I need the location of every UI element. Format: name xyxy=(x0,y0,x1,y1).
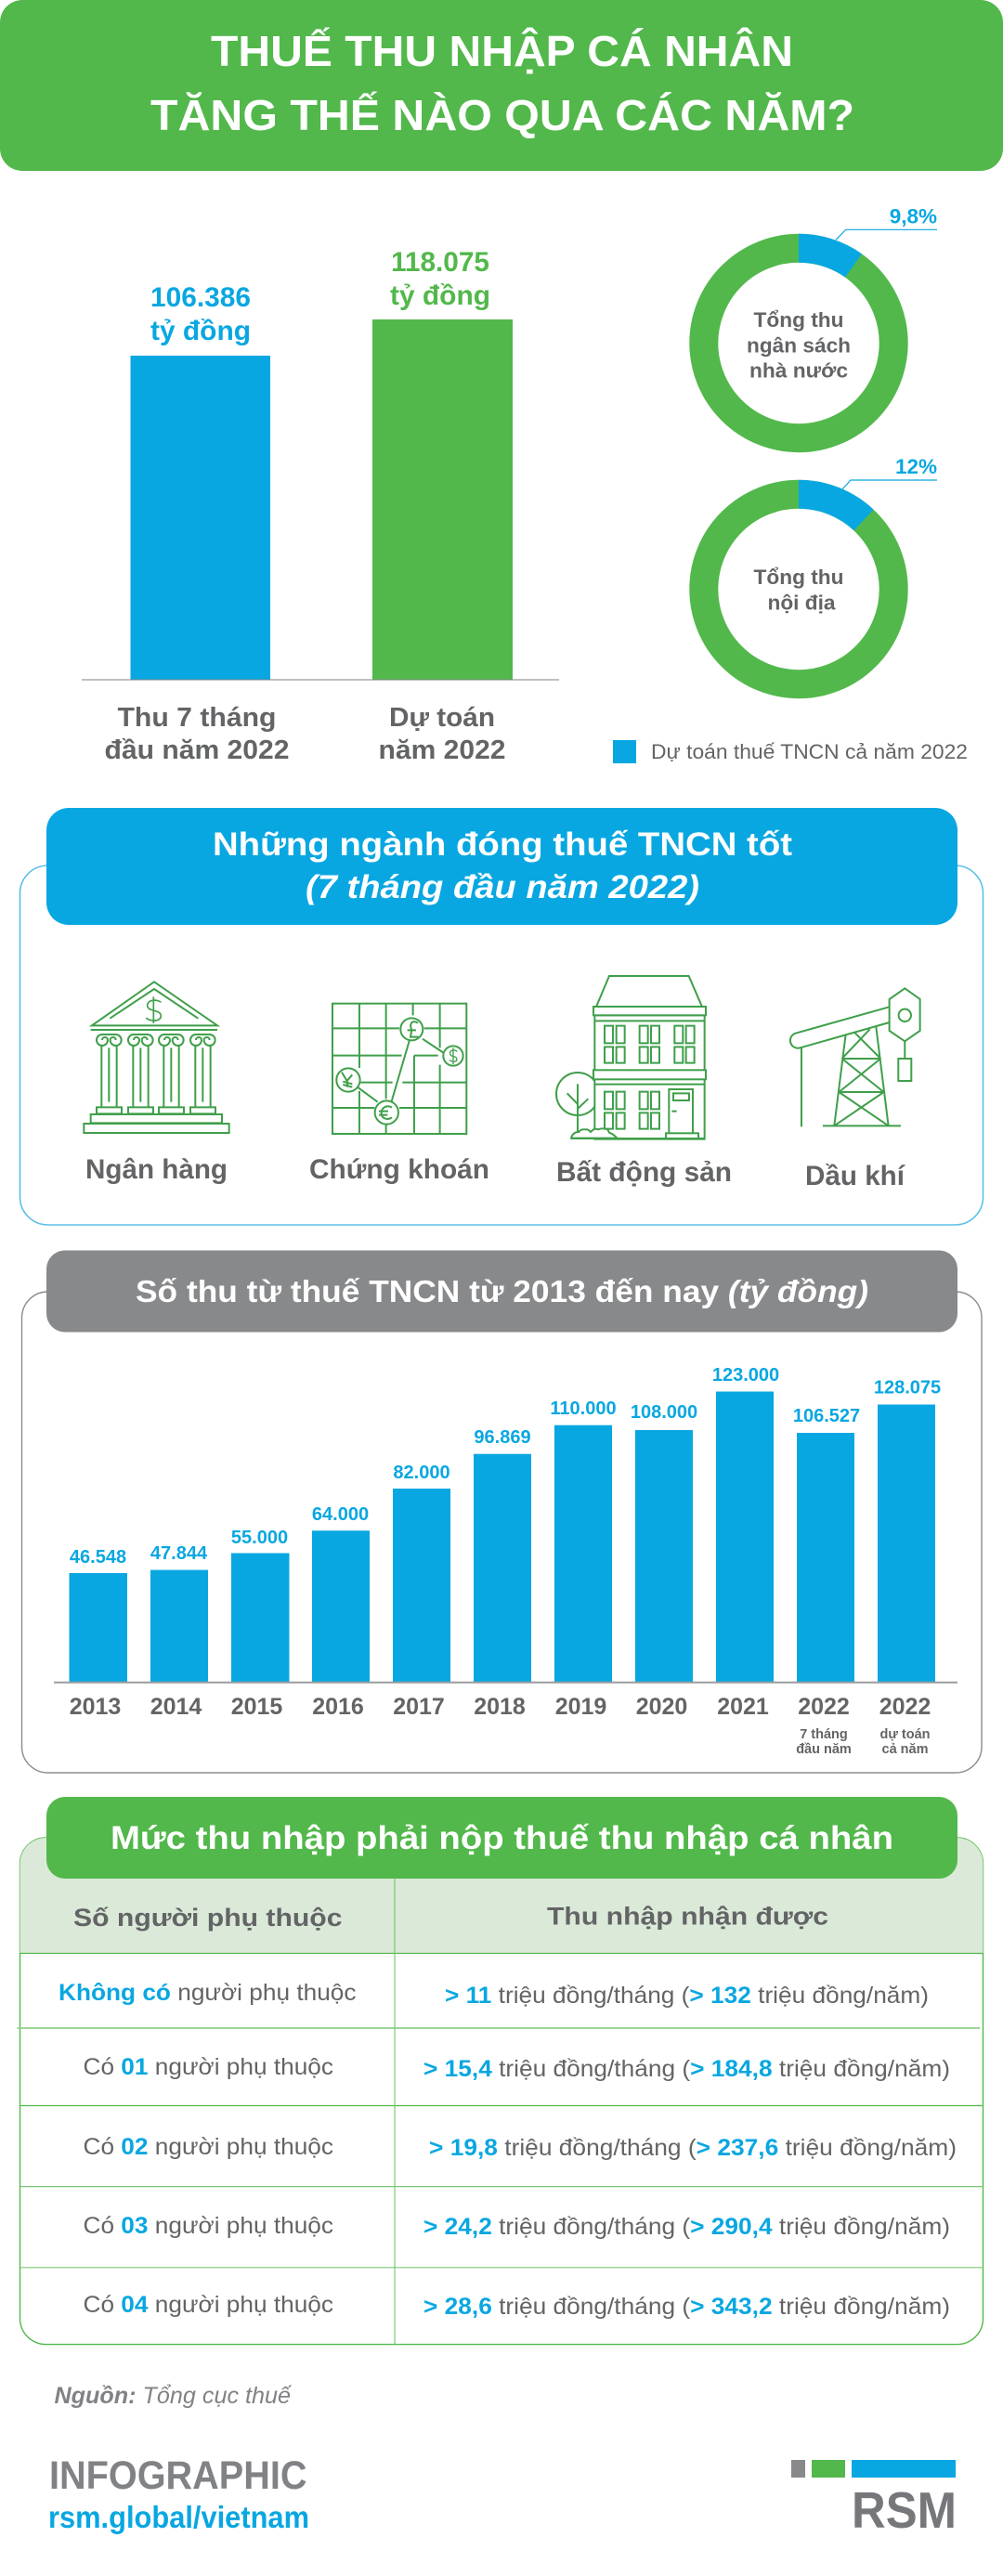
icon: stock chart xyxy=(332,1004,466,1134)
column chart: 96.869 xyxy=(474,1427,531,1448)
column chart: 82.000 xyxy=(393,1463,450,1483)
column chart: 64.000 xyxy=(312,1504,369,1525)
table row: three: > 24,2 triệu đồng/tháng ( > 290,4 triệu đồng/năm) xyxy=(423,2214,950,2240)
panel heading: sectors: (7 tháng đầu năm 2022) xyxy=(306,869,699,905)
table row: one xyxy=(84,2054,950,2082)
footer brand text: rsm.global/vietnam xyxy=(48,2500,309,2534)
donut: domestic revenue share: Tổng thu xyxy=(754,566,843,589)
comparison bar chart: tỷ đồng xyxy=(150,316,251,346)
column chart: 2022 xyxy=(798,1694,850,1720)
icon: oil pump xyxy=(790,988,920,1126)
comparison bar chart: 106.386 xyxy=(150,282,251,313)
panel heading: sectors: Những ngành đóng thuế TNCN tốt xyxy=(213,826,792,863)
table row: none: > 11 triệu đồng/tháng ( > 132 triệu đồng/năm) xyxy=(445,1983,929,2009)
comparison bar chart: Thu 7 tháng xyxy=(117,703,277,733)
sector labels: Ngân hàng xyxy=(85,1154,228,1185)
table row: three: Có 03 người phụ thuộc xyxy=(84,2213,333,2239)
comparison bar chart: đầu năm 2022 xyxy=(104,735,290,765)
table header: Số người phụ thuộc xyxy=(73,1904,342,1932)
title banner xyxy=(0,0,1003,171)
column chart: 2022 xyxy=(879,1694,931,1720)
panel heading: sectors xyxy=(46,808,957,925)
donut legend: Dự toán thuế TNCN cả năm 2022 xyxy=(651,740,968,763)
comparison bar chart: năm 2022 xyxy=(379,735,505,765)
panel: income threshold table xyxy=(17,1797,983,2345)
table header xyxy=(20,1838,983,1954)
footer brand text xyxy=(48,2453,309,2534)
column chart xyxy=(54,1365,957,1757)
sector labels: Dầu khí xyxy=(805,1161,905,1191)
icon: bank xyxy=(84,982,229,1133)
title banner: THUẾ THU NHẬP CÁ NHÂN xyxy=(211,27,793,75)
column chart: 55.000 xyxy=(231,1528,288,1548)
icon: real estate building xyxy=(556,976,706,1139)
column chart: 2017 xyxy=(393,1694,445,1720)
panel heading: table xyxy=(46,1797,957,1879)
sector labels: Chứng khoán xyxy=(309,1154,489,1185)
table row: two xyxy=(84,2134,957,2161)
panel heading: table: Mức thu nhập phải nộp thuế thu nhập cá nhân xyxy=(111,1820,893,1856)
column chart: 123.000 xyxy=(712,1365,779,1386)
table row: four: Có 04 người phụ thuộc xyxy=(84,2292,333,2318)
donut: state budget share: Tổng thu xyxy=(754,308,843,332)
column chart: 2021 xyxy=(717,1694,769,1720)
source note: Nguồn: Tổng cục thuế xyxy=(54,2383,293,2409)
donut: state budget share xyxy=(704,205,937,438)
table row: four xyxy=(84,2292,950,2320)
comparison bar chart xyxy=(82,247,559,765)
title banner: TĂNG THẾ NÀO QUA CÁC NĂM? xyxy=(150,91,854,139)
column chart: 2016 xyxy=(312,1694,364,1720)
panel heading: revenue xyxy=(46,1250,957,1332)
column chart: 47.844 xyxy=(150,1543,208,1564)
column chart: dự toán xyxy=(880,1727,931,1742)
column chart: 7 tháng xyxy=(800,1727,848,1742)
comparison bar chart: 118.075 xyxy=(391,247,489,278)
comparison bar chart: tỷ đồng xyxy=(390,280,490,311)
footer brand text: INFOGRAPHIC xyxy=(49,2453,306,2498)
panel heading: revenue: Số thu từ thuế TNCN từ 2013 đến nay (tỷ đồng) xyxy=(136,1274,868,1308)
donut: state budget share: 9,8% xyxy=(890,205,937,228)
table header: Thu nhập nhận được xyxy=(547,1902,828,1930)
table row: four: > 28,6 triệu đồng/tháng ( > 343,2 triệu đồng/năm) xyxy=(423,2294,950,2320)
column chart: 2019 xyxy=(555,1694,606,1720)
column chart: 128.075 xyxy=(874,1378,941,1399)
column chart: 106.527 xyxy=(793,1406,860,1426)
table row: three xyxy=(84,2213,950,2240)
table row: two: Có 02 người phụ thuộc xyxy=(84,2134,333,2160)
column chart: 2020 xyxy=(636,1694,687,1720)
table row: two: > 19,8 triệu đồng/tháng ( > 237,6 triệu đồng/năm) xyxy=(429,2135,957,2161)
table row: one: > 15,4 triệu đồng/tháng ( > 184,8 triệu đồng/năm) xyxy=(423,2056,950,2082)
donut: state budget share: nhà nước xyxy=(749,358,848,383)
column chart: 108.000 xyxy=(631,1402,697,1423)
donut: state budget share: ngân sách xyxy=(747,334,851,357)
sector labels: Bất động sản xyxy=(556,1157,732,1188)
donut: domestic revenue share xyxy=(704,455,937,684)
column chart: 2015 xyxy=(231,1694,282,1720)
sector labels xyxy=(85,1154,905,1191)
column chart: 110.000 xyxy=(550,1399,617,1419)
donut: domestic revenue share: 12% xyxy=(895,455,937,478)
column chart: 46.548 xyxy=(70,1547,126,1568)
column chart: cả năm xyxy=(882,1742,928,1757)
RSM logo xyxy=(791,2460,957,2539)
table row: one: Có 01 người phụ thuộc xyxy=(84,2054,333,2080)
table row: none: Không có người phụ thuộc xyxy=(59,1980,357,2006)
table row: none xyxy=(59,1980,929,2009)
panel: revenue since 2013 xyxy=(22,1250,982,1773)
column chart: 2013 xyxy=(70,1694,121,1720)
donut: domestic revenue share: nội địa xyxy=(767,591,836,615)
comparison bar chart: Dự toán xyxy=(389,703,495,733)
panel: good tax-paying sectors xyxy=(20,808,983,1225)
column chart: 2014 xyxy=(150,1694,202,1720)
column chart: đầu năm xyxy=(796,1742,852,1757)
RSM logo: RSM xyxy=(852,2481,957,2539)
column chart: 2018 xyxy=(474,1694,526,1720)
